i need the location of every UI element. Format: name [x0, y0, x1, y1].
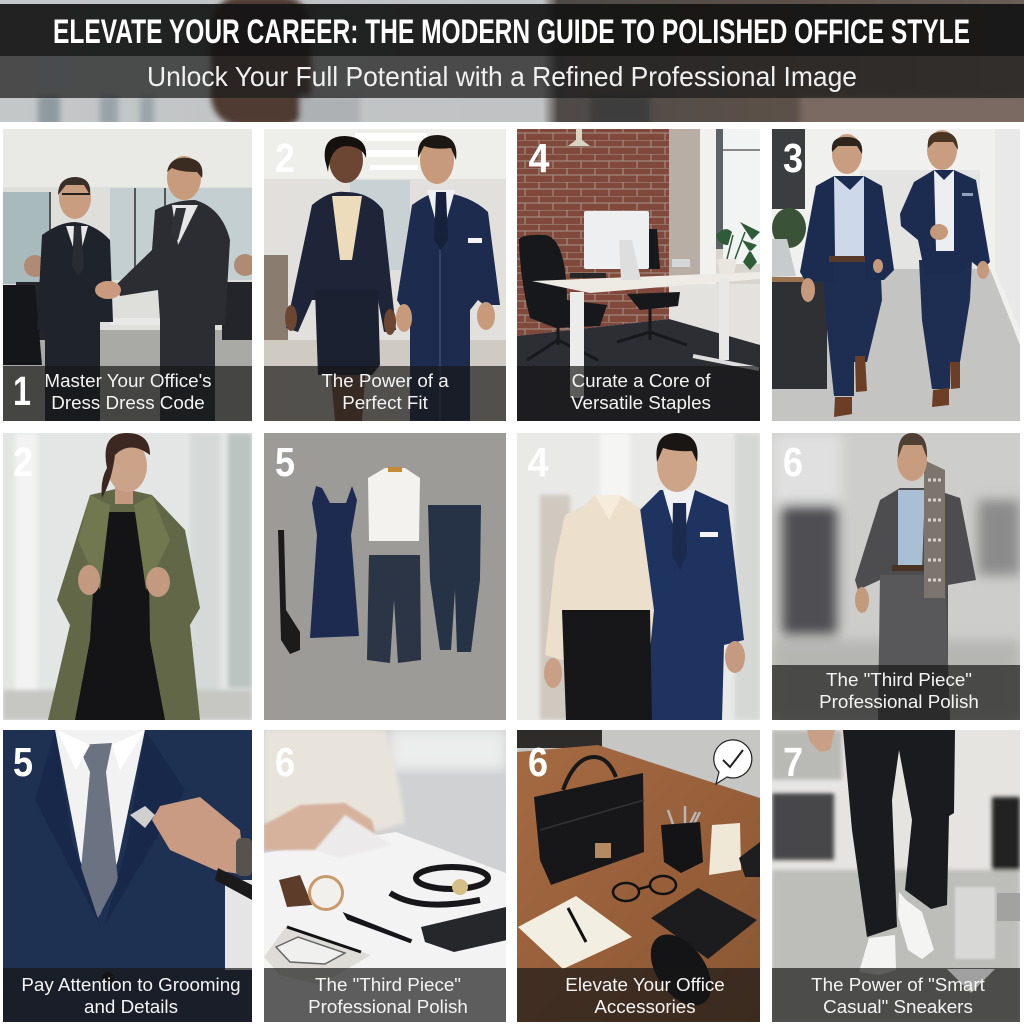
icon: navy dress — [310, 486, 359, 638]
panel: master your office's dress code — [3, 129, 256, 421]
step number: 5 — [275, 439, 295, 485]
icon: long jeans — [428, 505, 481, 652]
icon: glasses — [613, 876, 676, 901]
step number: 2 — [275, 135, 295, 181]
panel: men in navy suits walking — [772, 129, 1020, 421]
icon: black planner — [651, 888, 757, 959]
panel: smart casual sneakers — [772, 730, 1020, 1022]
panel: the power of a perfect fit — [264, 129, 506, 421]
caption: and Details — [84, 996, 178, 1017]
panel: grooming and details — [3, 730, 252, 1022]
icon: desk with monitor — [532, 211, 760, 398]
icon: potted plant — [716, 222, 760, 274]
person: man in grey blazer — [855, 433, 976, 720]
icon: pen cup — [661, 806, 703, 873]
icon: hands — [264, 803, 392, 858]
caption: Pay Attention to Grooming — [21, 974, 241, 995]
table surface — [264, 832, 506, 1022]
icon: hand with pocket square — [130, 797, 252, 900]
caption: Perfect Fit — [342, 392, 429, 413]
icon: left office chair — [519, 235, 607, 360]
person: left man — [800, 134, 894, 417]
subtitle: Unlock Your Full Potential with a Refined Professional Image — [147, 61, 857, 92]
icon: handshake — [95, 281, 121, 299]
person: black trousers — [843, 730, 955, 937]
icon: shirt and tie — [55, 730, 145, 918]
step number: 5 — [13, 739, 33, 785]
step number: 6 — [783, 439, 803, 485]
header banner — [0, 0, 1024, 126]
wooden desk — [517, 745, 760, 1022]
caption: Curate a Core of — [572, 370, 711, 391]
panel: third piece blazer and scarf — [772, 433, 1020, 720]
step number: 4 — [528, 439, 549, 485]
person: right man — [900, 130, 990, 407]
step number: 6 — [275, 739, 295, 785]
icon: hand — [807, 730, 835, 752]
step number: 2 — [13, 439, 33, 485]
step number: 3 — [783, 135, 803, 181]
caption: The "Third Piece" — [826, 669, 972, 690]
icon: grey arrow artefact — [947, 969, 995, 993]
step number: 6 — [528, 739, 548, 785]
icon: cream blouse on mannequin — [544, 495, 654, 720]
icon: leather belts — [390, 867, 488, 905]
panel: blouse and suit — [517, 433, 760, 720]
person: woman in navy blazer — [285, 136, 396, 421]
icon: gold buckle — [452, 879, 468, 895]
person: right man shaking hands — [116, 156, 230, 421]
caption: Master Your Office's — [44, 370, 212, 391]
caption: Accessories — [594, 996, 696, 1017]
caption: Professional Polish — [819, 691, 979, 712]
icon: notebook and pen — [518, 896, 632, 969]
icon: notepad and pen — [264, 925, 371, 985]
icon: white sneakers — [859, 892, 934, 975]
icon: black belt — [278, 530, 300, 654]
icon: ceiling lamp — [568, 129, 590, 146]
icon: mouse — [638, 923, 724, 1017]
icon: wristwatch — [279, 875, 344, 911]
caption: The "Third Piece" — [315, 974, 461, 995]
panel: olive trench coat — [3, 433, 252, 720]
person: left man — [37, 177, 113, 421]
caption: The Power of "Smart — [811, 974, 986, 995]
icon: black briefcase — [534, 757, 644, 885]
caption: Dress Dress Code — [51, 392, 205, 413]
icon: back office chair — [617, 229, 687, 345]
screen artefact blocks — [955, 887, 995, 959]
person: man in navy suit — [640, 433, 745, 720]
icon: fountain pen — [345, 914, 411, 942]
icon: jacket lapels — [35, 730, 185, 925]
step number: 4 — [528, 135, 550, 181]
icon: black planner corner — [739, 842, 760, 877]
panel: third piece accessories — [264, 730, 507, 1022]
panel: flat lay of clothing — [264, 433, 506, 720]
caption: Casual" Sneakers — [823, 996, 973, 1017]
panel: elevate your office accessories — [517, 730, 760, 1022]
person: woman in olive coat — [48, 433, 200, 720]
caption: Professional Polish — [308, 996, 468, 1017]
icon: black wallet — [421, 907, 507, 952]
icon: check speech bubble — [714, 740, 752, 784]
icon: short dark jeans — [367, 555, 421, 663]
icon: white shirt — [368, 468, 420, 541]
caption: Elevate Your Office — [565, 974, 725, 995]
step number: 1 — [13, 368, 31, 414]
icon: cream box — [709, 823, 741, 875]
person: man in navy suit — [396, 135, 500, 421]
panel: curate a core of versatile staples — [517, 129, 760, 421]
step number: 7 — [783, 739, 803, 785]
caption: The Power of a — [321, 370, 449, 391]
caption: Versatile Staples — [571, 392, 711, 413]
